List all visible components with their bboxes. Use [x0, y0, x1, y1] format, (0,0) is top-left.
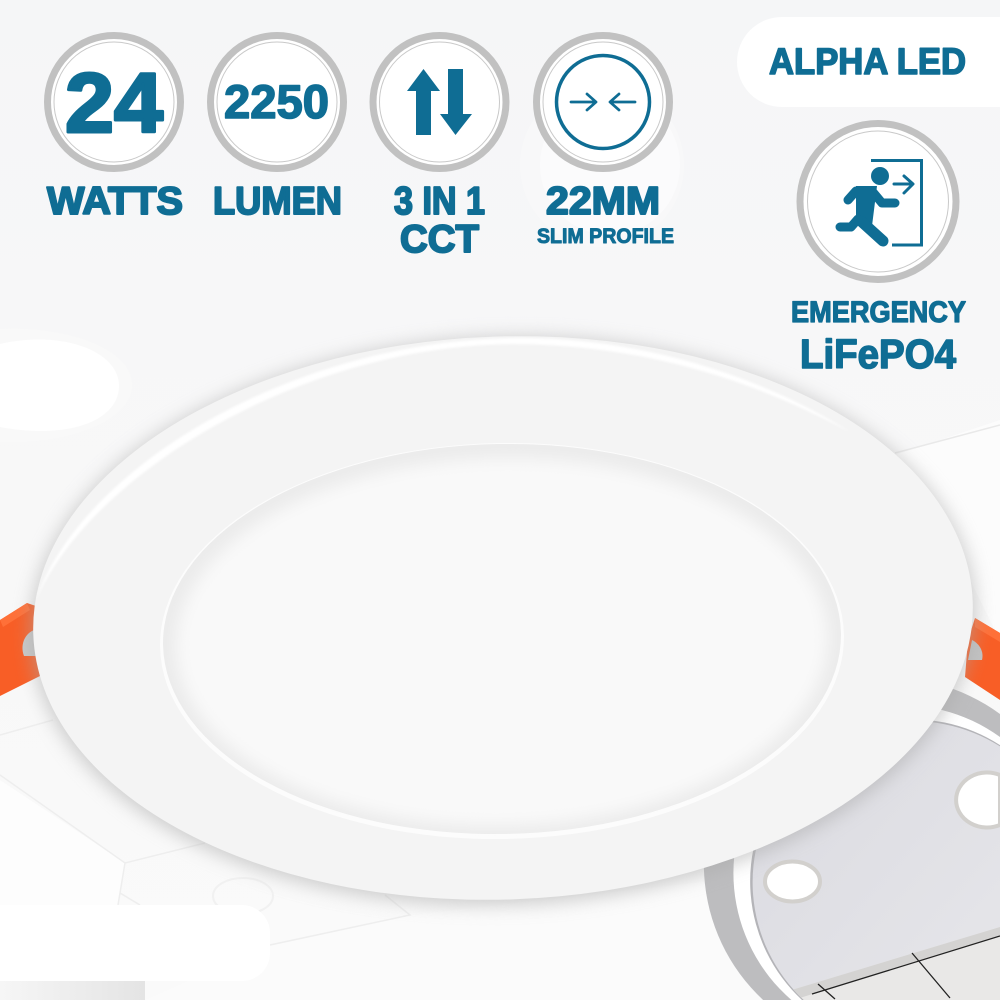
- icon: slim profile arrows in circle: [556, 56, 650, 148]
- inset: gauge close-up of panel back: [704, 678, 1000, 1000]
- spec: emergency LiFePO4: [791, 124, 966, 377]
- icon: running person exit: [840, 160, 922, 245]
- spec: 24 watts: [47, 36, 183, 223]
- value 2250: 2250: [224, 75, 329, 128]
- badge ring: [536, 36, 670, 168]
- label EMERGENCY: EMERGENCY: [791, 296, 966, 329]
- label CCT: CCT: [400, 218, 479, 261]
- badge ring: [210, 36, 344, 168]
- spec: 3 in 1 CCT: [373, 36, 506, 261]
- label SLIM PROFILE: SLIM PROFILE: [537, 225, 674, 248]
- inset indicator dot right: [956, 772, 1000, 828]
- badge ring: [800, 124, 956, 280]
- value 24: 24: [65, 56, 163, 150]
- diffuser edge shade: [160, 438, 844, 840]
- rim highlight: [36, 338, 850, 600]
- badge ring: [48, 36, 180, 168]
- label WATTS: WATTS: [47, 180, 183, 223]
- background downlight glow: [0, 329, 132, 442]
- label 22MM: 22MM: [546, 180, 660, 223]
- orange spring clip left: [0, 603, 40, 696]
- brand name: ALPHA LED: [769, 41, 966, 82]
- inset indicator dot left: [765, 862, 820, 902]
- label LUMEN: LUMEN: [213, 180, 342, 223]
- brand pill: [737, 17, 1000, 107]
- label LiFePO4: LiFePO4: [800, 331, 956, 377]
- panel rim: [23, 320, 983, 916]
- panel drop shadow: [20, 321, 986, 921]
- diffuser: [173, 452, 831, 832]
- spec: 2250 lumen: [210, 36, 344, 223]
- blank pill bottom left: [0, 905, 270, 981]
- spec: 22mm slim profile: [536, 36, 674, 248]
- LED panel: [23, 320, 983, 916]
- label 3 IN 1: 3 IN 1: [394, 180, 485, 223]
- badge ring: [373, 36, 506, 168]
- icon: up and down arrows: [407, 69, 472, 135]
- orange spring clip right: [965, 618, 1000, 700]
- diffuser edge highlight: [157, 437, 847, 845]
